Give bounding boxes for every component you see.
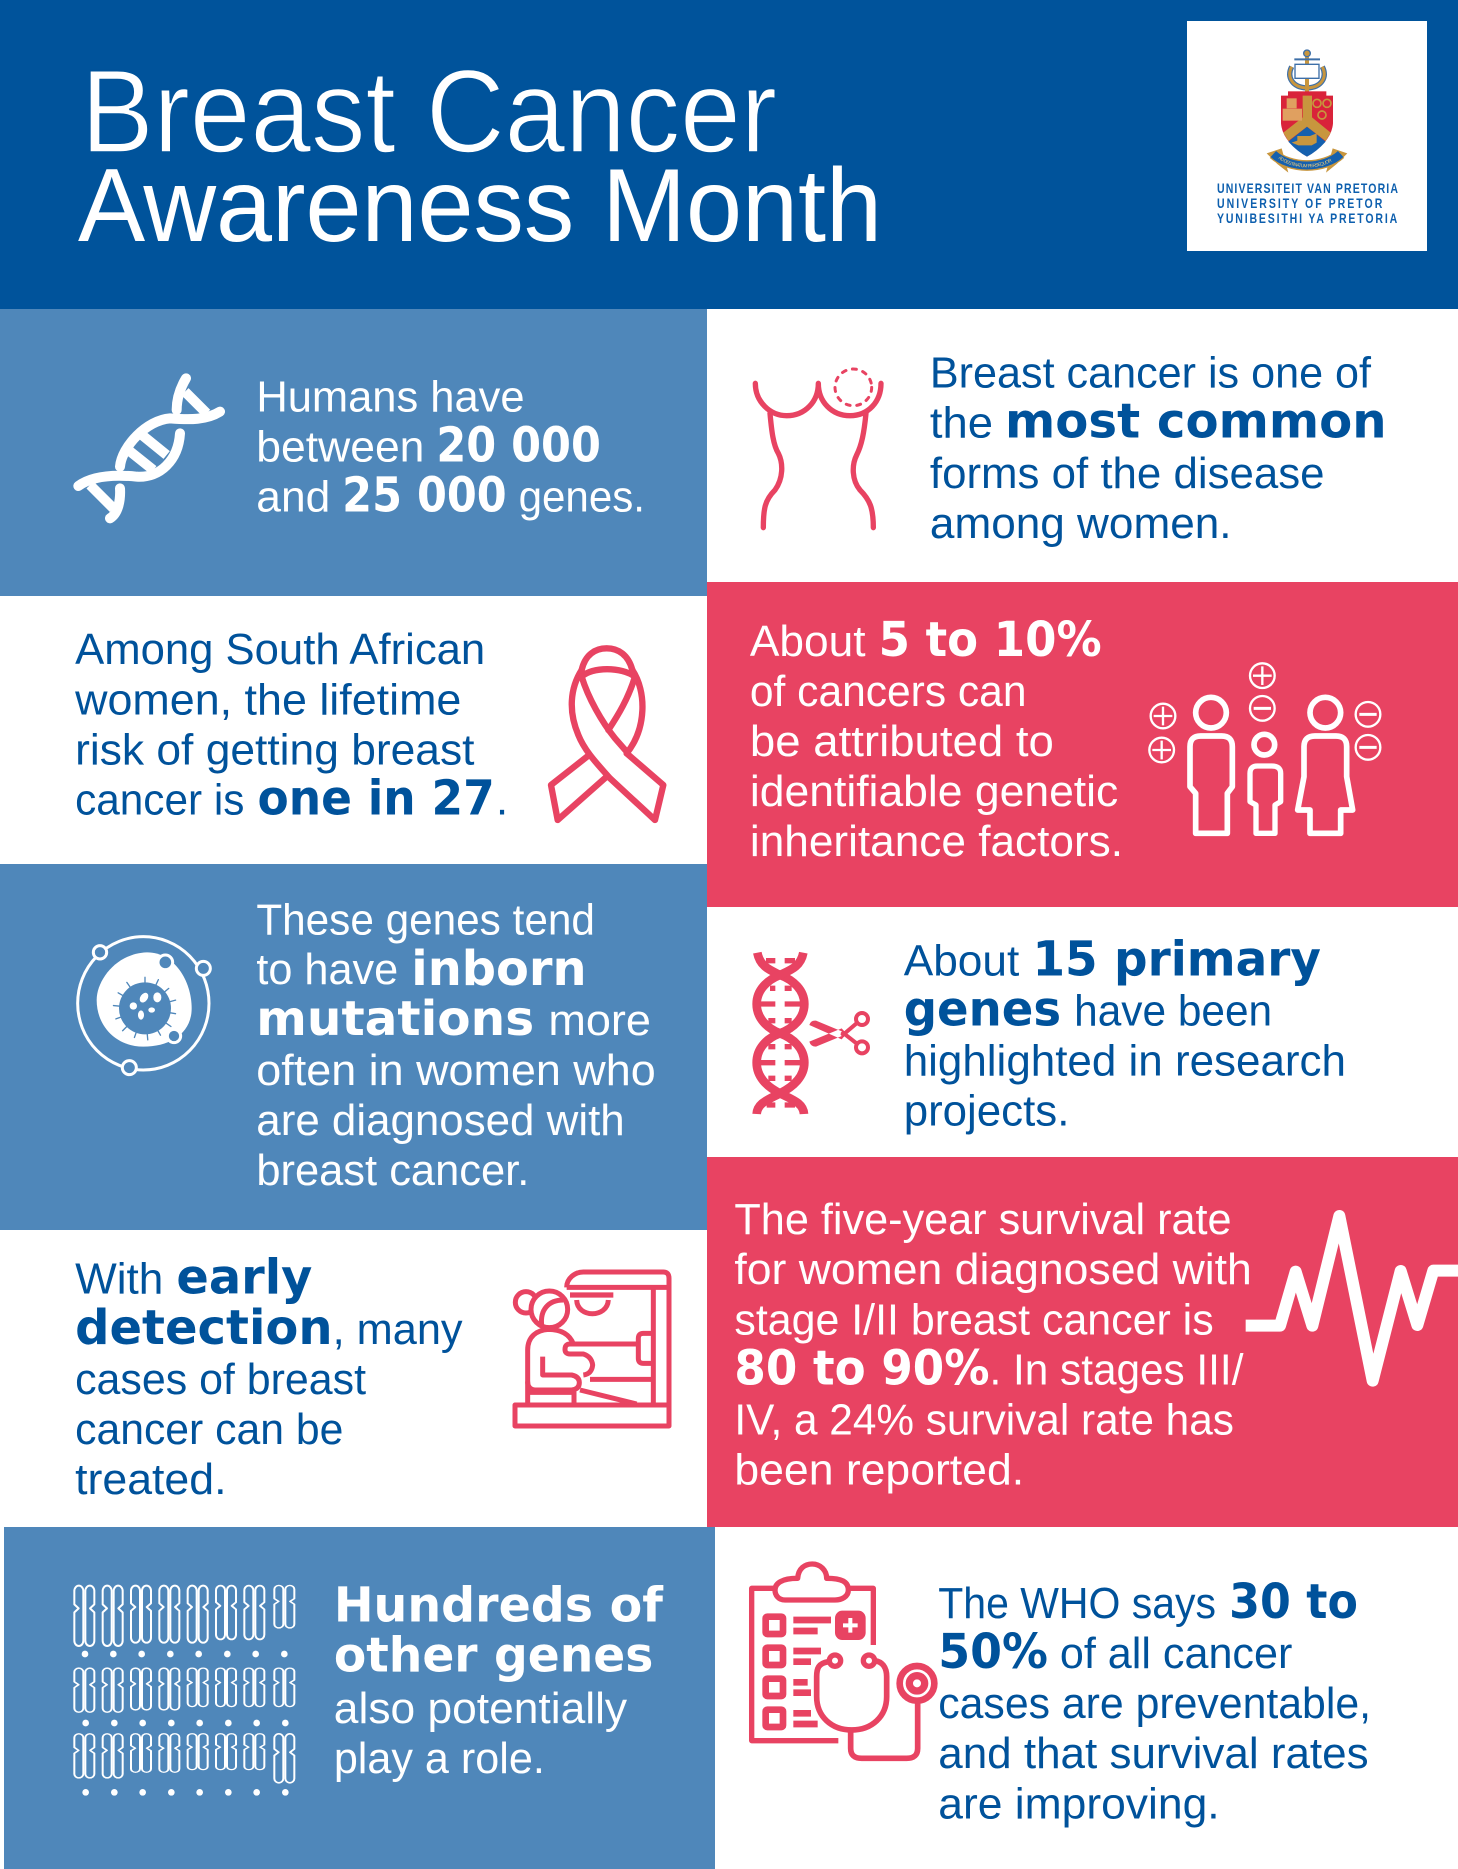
icon: heartbeat line [1246,1216,1458,1381]
text: inborn mutations: These genes tend [256,897,595,945]
text: primary genes: 15 primary [1032,932,1321,987]
text: lifetime risk [74,626,508,826]
panel: hundreds of genes [4,1527,715,1869]
icon: family with gene markers [1149,663,1380,833]
text: inborn mutations: more [548,997,651,1045]
text: prevention: The WHO says [938,1580,1216,1628]
text: inborn mutations: are diagnosed with [256,1097,625,1145]
text: most common [930,350,1387,548]
text: genes: Humans have [256,373,525,421]
text: primary genes: projects. [904,1088,1069,1136]
logo text: YUNIBESITHI YA PRETORIA [1217,211,1397,226]
text: inborn mutations: breast cancer. [256,1147,529,1195]
text: survival rate: stage I/II breast cancer is [734,1296,1214,1344]
text: inheritance: inheritance factors. [750,818,1123,866]
text: survival rate: . In stages III/ [990,1346,1244,1394]
text: inborn mutations: often in women who [256,1047,656,1095]
text: genes: 25 000 [342,468,507,523]
icon: chromosomes [74,1585,294,1796]
text: hundreds of genes: also potentially [334,1685,627,1733]
text: survival rate: The five-year survival rate [734,1196,1232,1244]
text: most common: forms of the disease [930,450,1325,498]
text: survival rate: IV, a 24% survival rate has [734,1396,1234,1444]
text: early detection: cancer can be [75,1406,343,1454]
panel: header [0,0,1458,309]
logo text [1217,181,1398,226]
text: survival rate: 80 to 90% [734,1341,990,1396]
text: inheritance: identifiable genetic [750,768,1118,816]
text: most common: among women. [930,500,1232,548]
text: hundreds of genes: other genes [334,1629,653,1684]
text: genes: between [256,423,424,471]
title: Awareness Month [78,148,882,264]
logo: University of Pretoria [1187,21,1427,251]
text: early detection: cases of breast [75,1356,366,1404]
panel: lifetime risk [74,626,663,826]
text: inborn mutations: to have [256,946,398,994]
text: lifetime risk: . [496,776,508,824]
text: survival rate: for women diagnosed with [734,1246,1252,1294]
text: primary genes: highlighted in research [904,1038,1346,1086]
panel: survival rate [707,1157,1458,1527]
text: primary genes [904,932,1346,1136]
logo text: UNIVERSITY OF PRETOR [1217,196,1383,211]
text: hundreds of genes [334,1579,664,1783]
text: most common: Breast cancer is one of [930,350,1372,398]
text: hundreds of genes: play a role. [334,1735,545,1783]
text: most common: the [930,400,993,448]
text: inborn mutations [256,897,656,1195]
text: survival rate [734,1196,1252,1494]
icon: DNA and scissors [757,953,868,1114]
text: lifetime risk: Among South African [75,626,485,674]
logo text: UNIVERSITEIT VAN PRETORIA [1217,181,1398,196]
text: lifetime risk: women, the lifetime [74,676,461,724]
text: prevention: cases are preventable, [938,1680,1371,1728]
text: early detection [75,1251,463,1504]
text: early detection: detection [75,1301,333,1356]
text: prevention: and that survival rates [938,1730,1369,1778]
title: Breast Cancer [81,46,777,178]
text: genes: 20 000 [436,418,601,473]
text: primary genes: genes [904,982,1061,1037]
panel: early detection [75,1251,669,1504]
icon: awareness ribbon [551,648,663,820]
icon: crest: AD DESTINATUM PERSEQUOR [1278,156,1332,168]
text: most common: most common [1005,395,1387,450]
text: early detection: With [75,1256,163,1304]
text: early detection: early [176,1251,312,1306]
panel: most common [755,350,1387,548]
panel background [0,309,707,596]
panel: inborn mutations [0,864,707,1230]
text: genes: genes. [519,473,645,521]
text: lifetime risk: one in 27 [258,771,495,826]
header background [0,0,1458,309]
text: inheritance: be attributed to [750,718,1054,766]
text: prevention: are improving. [938,1780,1220,1828]
text: inheritance [750,613,1123,866]
panel: primary genes [757,932,1346,1136]
icon: crest [1266,49,1348,172]
text: early detection: , many [333,1306,463,1354]
text: inheritance: of cancers can [750,668,1026,716]
panel background [4,1527,715,1869]
panel: genetic inheritance [707,582,1458,907]
panel: prevention [752,1564,1371,1828]
text: genes [256,373,645,523]
text: hundreds of genes: Hundreds of [334,1579,664,1634]
text: lifetime risk: cancer is [75,776,244,824]
text: lifetime risk: risk of getting breast [75,726,474,774]
text: inborn mutations: mutations [256,992,534,1047]
icon: clipboard and stethoscope [752,1564,934,1758]
text: prevention: 50% [938,1625,1048,1680]
icon: DNA helix [78,378,220,518]
title [78,46,882,264]
text: early detection: treated. [75,1456,227,1504]
text: prevention [938,1575,1371,1828]
text: primary genes: About [904,937,1019,985]
panel background [707,1157,1458,1527]
icon: torso [755,369,881,528]
text: inborn mutations: inborn [411,942,587,997]
text: prevention: 30 to [1229,1575,1358,1630]
panel background [0,864,707,1230]
panel background [707,582,1458,907]
text: primary genes: have been [1074,987,1272,1035]
panel: number of genes [0,309,707,596]
text: inheritance: 5 to 10% [879,613,1102,668]
text: prevention: of all cancer [1060,1630,1292,1678]
text: inheritance: About [750,618,866,666]
icon: mammogram machine [515,1272,669,1426]
icon: cell with mutations [78,937,210,1075]
text: genes: and [256,473,330,521]
text: survival rate: been reported. [734,1446,1024,1494]
